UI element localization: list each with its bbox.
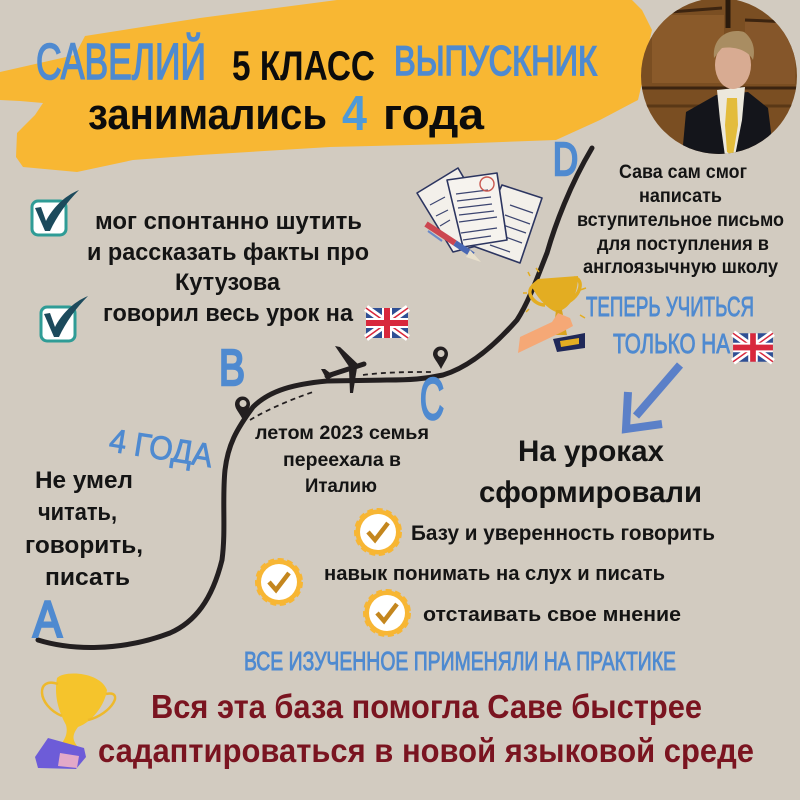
documents icon [417, 168, 542, 263]
dashed flight path [250, 372, 433, 420]
gold cup icon [35, 674, 115, 769]
achievement list: говорил весь урок на [103, 300, 354, 327]
conclusion [98, 688, 754, 769]
UK flag small [366, 308, 408, 338]
start skills text: говорить, [25, 532, 143, 559]
badge 2 [256, 560, 302, 604]
UK flag [733, 333, 773, 362]
text: letter achievement: Сава сам смог [619, 162, 747, 183]
text: letter achievement: написать [639, 186, 722, 207]
badge 3 [364, 590, 410, 636]
title [36, 32, 597, 141]
point letter A: A [33, 591, 62, 648]
move to Italy text: переехала в [283, 449, 401, 471]
airplane [321, 346, 364, 393]
point letter D: D [553, 133, 578, 185]
name: САВЕЛИЙ [36, 32, 206, 90]
checkbox 1 [32, 190, 79, 235]
map pin C [433, 346, 448, 369]
label: 4 years: 4 ГОДА [107, 421, 215, 474]
achievement list: мог спонтанно шутить [95, 208, 362, 235]
number 4: 4 [342, 87, 367, 141]
achievement list: Кутузова [175, 269, 281, 296]
grade: 5 КЛАСС [232, 42, 375, 89]
point letter C: C [420, 367, 444, 432]
route curve [38, 148, 592, 647]
photo of student [640, 0, 800, 156]
text: letter achievement: вступительное письмо [577, 210, 784, 231]
trophy in hand icon [518, 268, 586, 353]
start skills text: писать [45, 564, 130, 591]
achievement list [87, 208, 369, 327]
years word: года [383, 90, 485, 139]
move to Italy text [255, 422, 429, 497]
handwritten note: studies only in English [586, 291, 754, 359]
move to Italy text: Италию [305, 475, 377, 497]
conclusion: садаптироваться в новой языковой среде [98, 732, 754, 769]
studied line: занимались [88, 90, 327, 139]
move to Italy text: летом 2023 семья [255, 422, 429, 444]
heading: formed in lessons [479, 435, 702, 509]
text: letter achievement [577, 162, 784, 278]
text: letter achievement: для поступления в [597, 234, 769, 255]
skill 3: отстаивать свое мнение [423, 603, 681, 626]
blue arrow [626, 365, 680, 429]
start skills text [25, 467, 143, 591]
point letter B: B [219, 339, 245, 396]
skill 2: навык понимать на слух и писать [324, 563, 665, 585]
heading: formed in lessons: сформировали [479, 476, 702, 509]
text: letter achievement: англоязычную школу [583, 257, 778, 278]
badge 1 [356, 510, 400, 554]
skill 1: Базу и уверенность говорить [411, 522, 715, 545]
heading: formed in lessons: На уроках [518, 435, 664, 468]
achievement list: и рассказать факты про [87, 239, 369, 266]
conclusion: Вся эта база помогла Саве быстрее [151, 688, 702, 725]
handwritten note: studies only in English: ТОЛЬКО НА [613, 328, 730, 359]
start skills text: Не умел [35, 467, 133, 494]
yellow brush banner [0, 0, 652, 172]
start skills text: читать, [38, 499, 117, 526]
graduate: ВЫПУСКНИК [394, 37, 597, 84]
map pin B [235, 396, 250, 420]
checkbox 2 [41, 296, 88, 341]
